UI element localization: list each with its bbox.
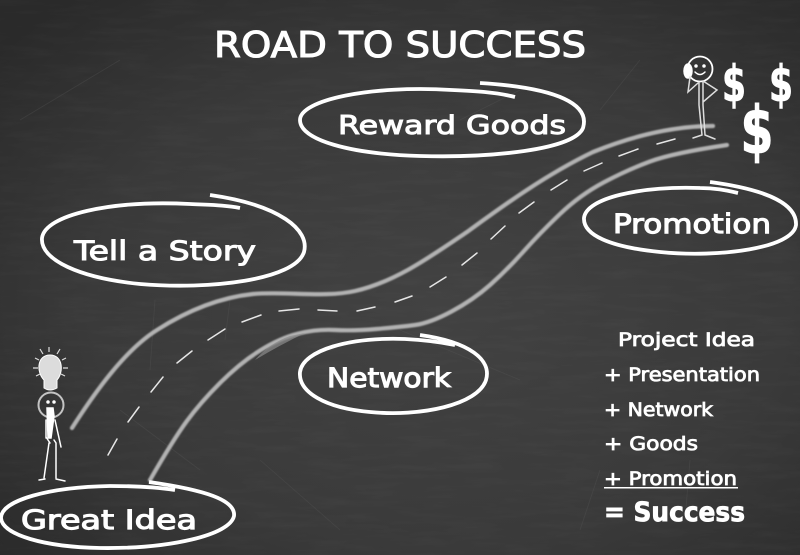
- road smear: [255, 333, 305, 360]
- bubble: Network: Network: [327, 363, 451, 394]
- underline: [604, 487, 738, 488]
- line: Goods: + Goods: [604, 433, 698, 455]
- icon: dollar sign left: $: [722, 55, 746, 113]
- line: Network: + Network: [604, 399, 713, 421]
- bubble: Great Idea: Great Idea: [21, 505, 197, 536]
- icon: light bulb: [33, 347, 68, 390]
- bubble: Promotion: [584, 182, 796, 254]
- bubble: Network: [300, 335, 487, 413]
- road: [72, 126, 727, 480]
- bubble: Tell a Story: Tell a Story: [73, 236, 256, 267]
- bubble: Reward Goods: [300, 83, 584, 156]
- icon: happy stick figure on phone: [684, 56, 717, 139]
- line: Project Idea: Project Idea: [618, 329, 755, 351]
- road upper edge: [72, 126, 713, 428]
- road centre dashes: [108, 139, 675, 455]
- line: Promotion: + Promotion: [604, 468, 737, 490]
- line: Presentation: + Presentation: [604, 364, 760, 386]
- formula list: [604, 329, 760, 528]
- bubble: Tell a Story: [42, 195, 305, 286]
- icon: dollar sign large: $: [740, 92, 774, 169]
- title: ROAD TO SUCCESS: [214, 25, 586, 66]
- road lower edge: [150, 145, 727, 480]
- bubble: Reward Goods: Reward Goods: [338, 111, 566, 141]
- bubble: Promotion: Promotion: [613, 209, 771, 240]
- line: Success: = Success: [604, 497, 745, 528]
- bubble: Great Idea: [1, 482, 234, 548]
- icon: thinking stick figure: [38, 392, 65, 481]
